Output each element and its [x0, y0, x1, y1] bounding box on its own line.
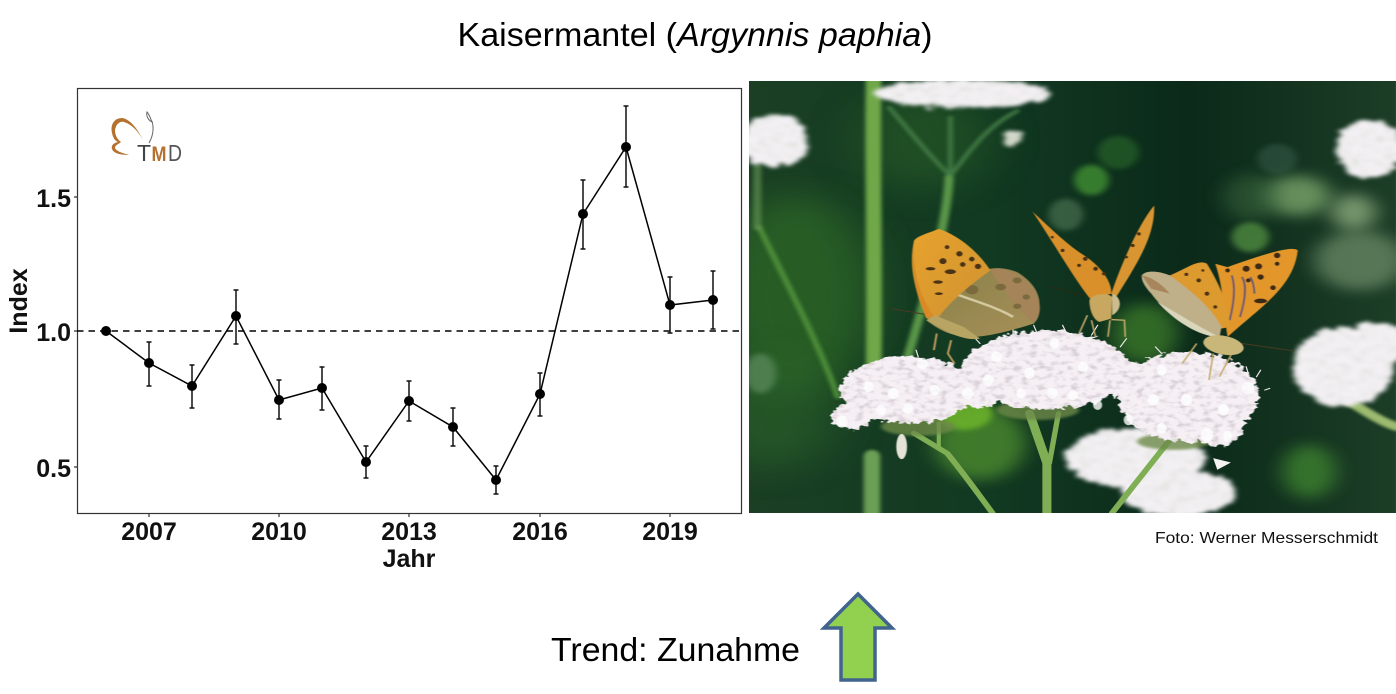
main flower cluster: [832, 325, 1270, 470]
panel: butterfly photo: [712, 80, 1396, 516]
hanging bud: [896, 434, 907, 459]
x axis tick labels: 2010: [251, 518, 307, 546]
butterfly right: [1142, 249, 1298, 380]
y axis tick labels: 1.5: [36, 185, 71, 213]
y axis tick labels: [36, 185, 71, 483]
photo credit: Foto: Werner Messerschmidt: [1155, 530, 1379, 547]
x axis tick labels: 2013: [381, 518, 437, 546]
y axis tick marks: [74, 197, 670, 517]
y axis tick labels: 1.0: [36, 319, 71, 347]
flower filaments: [852, 325, 1270, 390]
fallen petal: [1213, 458, 1231, 470]
logo: TMD: [111, 112, 182, 166]
plot frame: [78, 88, 742, 514]
data line: [106, 147, 713, 480]
x axis tick labels: 2007: [121, 518, 177, 546]
logo: TMD: M: [152, 143, 166, 166]
icon: green up arrow: [824, 594, 892, 680]
panel: index line chart: [5, 88, 742, 573]
trend label: Trend: Zunahme: [551, 631, 800, 668]
x axis tick labels: [121, 518, 698, 546]
x axis tick labels: 2019: [642, 518, 698, 546]
x axis title: Jahr: [383, 545, 436, 573]
reference line at index 1.0: [77, 330, 741, 332]
error bars: [146, 106, 716, 494]
data points: [101, 142, 718, 485]
logo: TMD: D: [168, 140, 182, 166]
logo: TMD: T: [137, 140, 151, 166]
butterfly center: [1032, 206, 1154, 337]
background flower clusters: [741, 80, 1396, 516]
x axis tick labels: 2016: [512, 518, 568, 546]
flower buds: [836, 339, 1254, 443]
foreground flower stems: [914, 413, 1170, 513]
butterfly left: [891, 229, 1040, 363]
y axis title: Index: [5, 268, 33, 334]
photo background: [749, 81, 1396, 513]
bokeh background: [712, 91, 1396, 498]
stems: [757, 81, 1396, 513]
title: Kaisermantel (Argynnis paphia): [458, 16, 933, 53]
y axis tick labels: 0.5: [36, 455, 71, 483]
